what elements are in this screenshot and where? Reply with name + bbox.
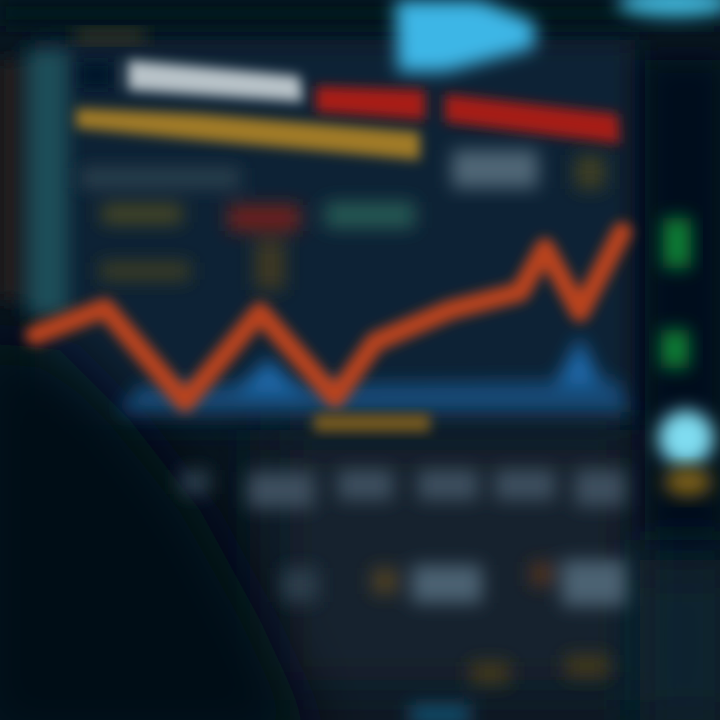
- chart: axis yellow label: [314, 414, 430, 432]
- heading: yellow subtitle bar: [76, 108, 420, 160]
- icon: cyan screen glow top: [395, 0, 720, 72]
- callout: grey value box: [452, 150, 538, 188]
- heading: small yellow tag: [75, 30, 145, 42]
- icon: glowing cyan light: [658, 410, 714, 496]
- icon: green indicators: [661, 218, 691, 368]
- chart: orange price line: [35, 232, 622, 402]
- dark foreground silhouette: [0, 340, 320, 720]
- chart: blue volume area: [118, 336, 628, 412]
- heading: title bar: [80, 60, 303, 102]
- heading: red banners: [316, 86, 620, 144]
- table: data rows: [180, 470, 626, 720]
- legend row: [80, 155, 605, 290]
- panel: left teal edge: [0, 50, 68, 315]
